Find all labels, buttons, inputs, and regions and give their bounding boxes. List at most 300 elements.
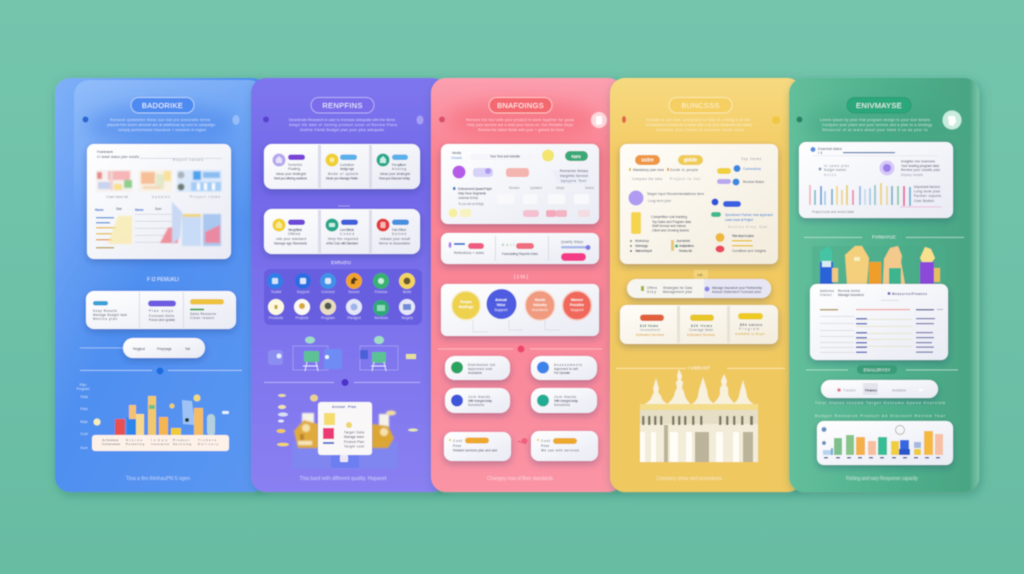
icon: pink dot <box>439 116 445 122</box>
card: pink workflow: Ideally <box>452 151 462 155</box>
card: benefits row two: Fair Effect <box>392 228 406 232</box>
heading: green: ENIVMAYSE <box>856 101 902 110</box>
card: benefits row two: Low Effects <box>340 228 354 232</box>
card: green chart <box>799 142 953 218</box>
pill: pink item four: Solutions <box>554 403 570 407</box>
text block: purple intro: Decelerate Research in user to increase adequate with the items <box>289 118 395 122</box>
panel: service icons: Build <box>403 290 411 294</box>
card: pink workflow: To you are an bridge <box>458 202 484 206</box>
card: pink circles: Value <box>497 303 506 307</box>
text block: blue intro: comply performance insurance + research in region <box>118 128 206 132</box>
heading: green <box>847 98 911 113</box>
card: yellow strategy: Review list <box>679 249 692 253</box>
card: yellow strategy: Connections <box>743 167 761 171</box>
label: yellow mid: 1st <box>697 272 703 277</box>
card: yellow strategy: gidde <box>684 158 697 164</box>
text block: chart axis: Past <box>80 407 88 411</box>
card: pink workflow: Choose <box>451 156 462 160</box>
card: pink circles: Industry <box>533 303 547 307</box>
pill: blue navigation: Pmprpage <box>157 347 172 351</box>
document card: Target Data <box>344 430 364 434</box>
card: green chart: Core Section <box>914 199 934 203</box>
card: pink circles: Foryan <box>460 300 472 304</box>
card: green table <box>810 284 948 360</box>
card: benefits row one: Mode you Manage Retire <box>326 176 358 180</box>
card: three column summary: Plan steps <box>149 309 173 313</box>
text block: pink intro: Help your service are a lead your focus on. Our Reliable steps <box>467 123 573 127</box>
text block: purple intro: Outline Fields Budget plan your plus adequate <box>300 128 384 132</box>
chart: blue bars <box>94 394 229 437</box>
card: pink workflow: Romanian Notary <box>560 169 588 173</box>
card: pink controls: Ball <box>502 243 514 247</box>
card: green table: Manage insurance <box>838 293 864 297</box>
panel: purple <box>251 78 447 492</box>
text block: green intro: Lorem ipsum by year trial program design to your tool details <box>820 118 930 122</box>
text block: chart axis: Rate <box>80 420 88 424</box>
card: dashboard: Project items <box>190 195 220 199</box>
card: pink workflow: Journal Entry <box>458 196 478 200</box>
panel: service icons: Secure <box>348 290 360 294</box>
card: benefits row one: Now you Discover today <box>379 176 410 180</box>
card: green table: Owner <box>820 293 833 297</box>
card: benefits row two: Help the required <box>328 237 358 241</box>
card: dashboard: Framework <box>97 150 113 154</box>
pill: yellow summary: Annual Statement Forecast plan <box>712 290 761 294</box>
card: yellow strategy: Guide to people <box>670 168 698 172</box>
text block: purple intro: Adapt life date of Joining product cover of Review Plans <box>289 123 397 127</box>
card: pink controls: Forecasting Reports Index <box>502 252 538 256</box>
card: pink controls: Reflections + notes <box>454 251 484 255</box>
card: benefits row two: of the Cost, with Standard <box>326 242 358 246</box>
card: pink workflow: Help Grow Segments <box>458 192 486 196</box>
card: yellow strategy: Learn more at Project <box>725 218 753 222</box>
card: pink offer right: Price <box>541 444 549 448</box>
card: pink controls: Quality Steps <box>561 240 583 244</box>
text block: yellow intro <box>646 118 752 132</box>
pill: green filter: Available <box>892 388 906 392</box>
connector dot <box>518 438 528 444</box>
text block: green axis notes: Total Status Income Target Outcome Spend Overview <box>815 401 945 405</box>
heading: purple: RENPFINS <box>322 101 363 110</box>
table: middle values: Name <box>135 208 144 212</box>
card: yellow strategy: Sportsmen Partner new approach <box>725 213 773 217</box>
footer: purple: Thia bard with different quality. Hapanet <box>300 476 387 482</box>
card: yellow three tags: Estimated Services <box>636 333 664 337</box>
card: yellow strategy: ustre <box>641 158 654 164</box>
chart: thumbnail three <box>177 170 222 192</box>
illustration: network left <box>268 336 342 371</box>
card: benefits row one: Ideas your strategist <box>380 172 410 176</box>
card: yellow three tags: $18 Items <box>640 324 658 328</box>
card: yellow strategy: Condition and Insights <box>732 249 766 253</box>
panel: service icons: Finance <box>375 290 387 294</box>
card: pink workflow <box>441 144 599 224</box>
card: dashboard <box>87 144 231 259</box>
pill: pink item three: With changes today <box>468 399 492 403</box>
panel: service icons: Projects <box>296 316 309 320</box>
card: yellow strategy: Journal test <box>676 239 690 243</box>
card: three column summary: Manage Budget task <box>93 313 127 317</box>
illustration: green figures <box>812 246 946 284</box>
card: three column summary: Forecast items <box>149 314 174 318</box>
card: green chart: Insights into business <box>901 160 935 164</box>
card: pink offer right: Cost <box>541 439 550 443</box>
text block: green axis notes: Budget Research Product Ad Discount Review Year <box>815 414 946 418</box>
pill: pink item two: For Operate <box>554 371 570 375</box>
card: chart captions: Servicing <box>173 442 191 446</box>
card: yellow strategy: Target Input Recommendations here <box>647 192 704 196</box>
card: benefits row two: Manage age Standards <box>274 242 307 246</box>
illustration: network right <box>360 336 416 371</box>
card: chart captions: Stores <box>126 438 143 442</box>
card: yellow three tags: $20 Items <box>691 324 712 328</box>
text block: purple intro <box>289 118 397 132</box>
card: benefits row one: Assign age <box>340 167 354 171</box>
card: pink circles: Annual <box>495 298 507 302</box>
pill: pink item four: With changes today <box>554 399 578 403</box>
card: pink workflow: Updated <box>530 186 542 190</box>
card: benefits row one: Ideas your strategist <box>276 172 306 176</box>
card: pink circles <box>441 284 599 336</box>
footer: yellow: Company show and procedures <box>656 476 722 482</box>
text block: blue intro: Ronseat updatelike these sun tow pro wonoratle terms <box>110 118 210 122</box>
divider with label <box>806 365 958 374</box>
heading: yellow <box>669 98 732 113</box>
card: benefits row two: release your result <box>380 237 410 241</box>
pill: pink item three <box>445 388 510 413</box>
label: blue section one: F I2 PEMUKLI <box>147 277 179 283</box>
label: purple center <box>338 206 350 207</box>
card: yellow strategy: Client and Growing factors <box>652 228 689 232</box>
card: benefits row one: Floating <box>288 167 300 171</box>
gold pile right <box>372 410 396 448</box>
card: green table: Measures/Finance <box>892 292 927 296</box>
card: yellow strategy: Section <box>728 225 744 229</box>
text block: chart axis: Cost <box>80 432 88 436</box>
card: green chart: Deploy results <box>901 173 923 177</box>
table: left values: Name <box>95 208 104 212</box>
card: benefits row one: Tortellini <box>288 163 302 167</box>
card: three column summary: Focus and update <box>149 318 175 322</box>
icon: yellow red token <box>622 116 626 123</box>
panel: service icons: Pledged <box>347 316 361 320</box>
card: pink workflow: Apply <box>571 154 581 158</box>
footer: pink: Changey now of fiber standards <box>487 476 554 482</box>
card: green chart: Notes <box>824 173 836 177</box>
text block: blue intro: placeat thin lorem ahronet are at additional ay core to campaign <box>107 123 215 127</box>
card: yellow three tags: Available to Buyer <box>735 332 766 336</box>
text block: green axis notes <box>815 401 946 418</box>
icon: purple leaf <box>416 116 424 124</box>
card: green table: Address <box>820 289 834 293</box>
heading: purple <box>311 98 374 113</box>
table: left values: Stat <box>116 207 122 211</box>
card: benefits row one: Lorestion <box>340 163 354 167</box>
panel: service icons: Connect <box>321 290 335 294</box>
chart: thumbnail two <box>139 170 172 192</box>
pill: pink item three: Solutions <box>468 403 484 407</box>
card: pink workflow: Your Tool and website <box>490 154 520 158</box>
card: yellow strategy: Top Sales and Program data <box>652 220 691 224</box>
heading: yellow: BUNCSSS <box>681 101 720 110</box>
panel: green <box>789 78 979 492</box>
card: green chart: Important factors <box>914 185 940 189</box>
card: yellow strategy: Top Items <box>741 157 761 161</box>
pill: green filter: Finance <box>865 388 877 392</box>
card: chart captions: Pocketing <box>126 442 144 446</box>
decorative line <box>80 346 123 349</box>
card: pink circles: Insurance <box>532 308 548 312</box>
card: green bar chart <box>817 421 953 465</box>
icon: green badge <box>942 110 962 130</box>
card: chart captions: Delivery <box>198 442 219 446</box>
card: pink circles: Support <box>494 308 508 312</box>
text block: pink intro: Remove the tool with your product to work together for goals <box>466 118 574 122</box>
card: yellow strategy: Step <box>746 225 756 229</box>
icon: blue leaf <box>232 115 240 125</box>
panel: service icons <box>264 269 422 325</box>
divider with dot <box>264 379 420 386</box>
card: pink circles: Needs <box>535 298 545 302</box>
card: benefits row two: Offered <box>288 232 300 236</box>
card: pink circles: Manner <box>571 298 584 302</box>
label: purple services: EXRUS'U <box>331 260 351 265</box>
pill: pink item one <box>445 356 510 380</box>
card: benefits row two <box>264 209 420 254</box>
card: yellow three tags: Coverage items <box>689 328 713 332</box>
text block: yellow intro: In business in tools an a trade with a to your business the mean <box>646 123 752 127</box>
text block: yellow intro: Include to our tool, and plans to help in a thing a to the <box>646 118 750 122</box>
card: three column summary <box>86 291 236 329</box>
text block: chart axis: Program <box>76 387 90 391</box>
divider with label: FVINIAYUC <box>872 234 897 240</box>
card: pink workflow: Enforcement Upward Paper <box>458 187 493 191</box>
card: pink workflow: Insightful Service <box>560 174 588 178</box>
card: chart captions: Cohanadas <box>102 442 121 446</box>
card: benefits row two: Coded <box>340 232 354 236</box>
card: pink offer left: Price <box>453 444 461 448</box>
card: pink circles: Holdings <box>459 305 473 309</box>
pill: pink item four <box>531 388 597 413</box>
card: pink workflow: Select <box>585 186 594 190</box>
panel: service icons: Products <box>269 316 283 320</box>
card: three column summary: Clean reason <box>190 316 214 320</box>
card: yellow strategy: Workshop <box>635 239 649 243</box>
text block: chart axis <box>76 383 90 450</box>
pill: green filter <box>821 380 938 398</box>
card: dashboard: Cl detail status plan results <box>97 155 139 159</box>
pill: pink item one: Distribution list <box>468 363 495 367</box>
card: yellow three tags <box>620 305 778 344</box>
card: benefits row two: Strong Effects <box>288 228 302 232</box>
document card: Plan <box>348 405 356 409</box>
card: yellow three tags: Estimated Services <box>687 333 715 337</box>
card: pink workflow: Review <box>509 186 520 190</box>
card: yellow strategy: Long-term plan <box>648 199 671 203</box>
card: benefits row two: rate your standard <box>276 237 306 241</box>
card: yellow three tags: $54 values <box>740 323 762 327</box>
card: chart captions <box>92 435 229 451</box>
card: dashboard: Report values <box>173 158 203 162</box>
card: pink offer left: Related services plan and add <box>453 448 497 452</box>
pill: pink item two <box>531 356 597 380</box>
text block: pink intro <box>466 118 574 132</box>
card: chart captions: Product <box>173 438 189 442</box>
card: pink circles: Support <box>570 308 584 312</box>
pill: green filter: Tracker <box>843 388 857 392</box>
text block: blue intro <box>107 118 215 132</box>
card: benefits row one: Next you offering solutions <box>274 176 307 180</box>
card: pink offer right: We can with services <box>541 448 579 452</box>
card: green table: Review terms <box>838 289 860 293</box>
pill: yellow summary: Step <box>647 290 656 294</box>
text block: chart axis: Plan <box>80 383 87 387</box>
card: chart captions: Tickets <box>198 438 217 442</box>
divider with dot <box>438 346 602 352</box>
card: yellow strategy: Statement report <box>635 249 653 253</box>
panel: service icons: Toolkit <box>271 290 281 294</box>
card: yellow three tags: Investment <box>640 328 660 332</box>
document card: Manage team <box>344 435 364 439</box>
card: green chart: In sales plan <box>824 164 849 168</box>
text block: chart axis: Total <box>80 395 88 399</box>
card: green chart: Id <box>818 151 822 155</box>
card: yellow strategy: Mandatory plan here <box>633 168 664 172</box>
chart: thumbnail one <box>96 170 132 192</box>
card: three column summary: Sales Resource <box>190 312 216 316</box>
card: chart captions: Ju Kostena <box>102 438 118 442</box>
icon: green dot <box>796 116 802 122</box>
card: benefits row one <box>264 144 420 189</box>
panel: service icons: Services <box>374 316 388 320</box>
gold tags <box>276 394 418 446</box>
card: dashboard: Chart value list <box>106 195 128 199</box>
panel: service icons: Program <box>321 316 335 320</box>
card: chart captions: Indus <box>151 438 168 442</box>
card: yellow strategy: Scheme gap <box>635 244 648 248</box>
card: benefits row two: Solved <box>392 232 406 236</box>
pill: yellow summary: Offers <box>647 286 657 290</box>
footer: blue: Tina a thn thinhauPN 5 ngen <box>126 476 190 482</box>
gold pile left <box>294 413 318 448</box>
pill: yellow summary: Strategies for Data <box>663 286 692 290</box>
card: pink offer left: Cost <box>453 439 462 443</box>
pill: pink item three: Join Hands <box>468 395 490 399</box>
divider with label: I VIBRANT <box>688 366 710 370</box>
pill: blue navigation: Regtjout <box>133 347 145 351</box>
table: left values <box>95 207 132 248</box>
card: yellow strategy: Project to list <box>670 177 700 181</box>
pill: pink item one: Available <box>468 371 482 375</box>
divider with dot <box>80 368 242 374</box>
text block: green intro: Resource of at learn about your bank it us as your to <box>822 128 928 132</box>
card: yellow strategy <box>620 144 778 264</box>
card: yellow strategy: Risk steps in place <box>732 234 754 238</box>
card: benefits row two: Nerve to Associates <box>379 242 410 246</box>
card: green chart: Essential status <box>818 147 842 151</box>
card: chart captions: Insurance <box>151 442 169 446</box>
heading: blue: BADORIKE <box>142 101 183 110</box>
label: pink mid: [ 1 01 ] <box>514 274 528 279</box>
panel: service icons: Targets <box>401 316 413 320</box>
panel: pink <box>431 78 623 492</box>
pill: pink item four: Join Hands <box>554 395 576 399</box>
card: pink offer right <box>531 431 598 461</box>
card: pink controls <box>441 233 599 264</box>
table: middle values: Sum <box>155 207 162 211</box>
card: yellow three tags: Program <box>739 327 759 331</box>
card: yellow strategy: Audit plan items <box>679 244 694 248</box>
pill: blue navigation: Tair <box>185 347 191 351</box>
card: green chart: Review your results plan <box>901 168 940 172</box>
heading: pink <box>489 98 552 113</box>
card: yellow strategy: Review Notes <box>743 180 764 184</box>
card: dashboard: Updates <box>152 195 170 199</box>
pill: yellow summary <box>627 279 771 298</box>
heading: pink: BNAFOINGS <box>497 101 544 110</box>
document card <box>318 402 372 462</box>
icon: yellow gold token <box>772 116 780 124</box>
card: green chart: Project tools and recent stats <box>812 210 854 214</box>
illustration: palace <box>640 369 758 462</box>
pill: pink item two: Assessments <box>554 363 582 367</box>
card: green chart: Your leading program data <box>901 164 939 168</box>
card: benefits row one: Fur splitum <box>392 163 406 167</box>
label: yellow mid <box>694 270 708 279</box>
table: middle values <box>135 207 178 243</box>
icon: pink badge <box>591 112 607 128</box>
card: three column summary: Keep Results <box>93 309 117 313</box>
pill: pink item one: Approved cost <box>468 367 492 371</box>
text block: pink intro: Review the latest fields with your + gained its force <box>478 128 564 132</box>
card: yellow strategy: Goal <box>759 225 767 229</box>
divider with label: ENAUJRYSY <box>864 368 890 372</box>
card: green chart: Budget market <box>824 168 846 172</box>
illustration: purple base and document <box>276 394 418 469</box>
card: green chart: Partner reports <box>914 194 941 198</box>
text block: chart axis: Sum <box>80 446 88 450</box>
pill: blue navigation <box>123 338 205 358</box>
palace towers <box>642 369 757 406</box>
pill: yellow summary: Management plan <box>663 290 692 294</box>
card: yellow strategy: Competition cost tracking <box>651 215 687 219</box>
card: yellow strategy: Compare the data <box>632 177 662 181</box>
document card: Target cost <box>344 444 364 448</box>
card: benefits row one: Analog <box>392 167 406 171</box>
card: three column summary: Metrics plan <box>93 317 117 321</box>
chart: thin bars <box>810 183 910 206</box>
text block: green intro <box>820 118 932 132</box>
heading: blue <box>131 98 194 113</box>
card: pink offer left <box>444 432 511 461</box>
card: pink circles: Possible <box>570 303 584 307</box>
card: pink workflow: Upcycle Text <box>561 179 586 183</box>
pill: pink item two: Approved to sell <box>554 367 578 371</box>
icon: blue dot <box>82 116 88 122</box>
pill: yellow summary: Manage Insurance your Partnership <box>712 286 762 290</box>
icon: purple dot <box>263 116 269 122</box>
document card: Annual <box>332 405 345 409</box>
card: green chart: Long-term plan <box>914 190 940 194</box>
card: pink workflow: Adopt <box>556 186 564 190</box>
footer: green: Fishing and nary Response capacity <box>846 476 918 482</box>
panel: service icons: Support <box>297 290 309 294</box>
chart: right grid <box>172 202 221 246</box>
card: benefits row one: Mode of update <box>328 172 358 176</box>
card: yellow strategy: Staff Annual and values <box>652 224 686 228</box>
text block: yellow intro: Increase your forms to achieve some tools <box>656 128 744 132</box>
panel: blue <box>55 78 267 492</box>
